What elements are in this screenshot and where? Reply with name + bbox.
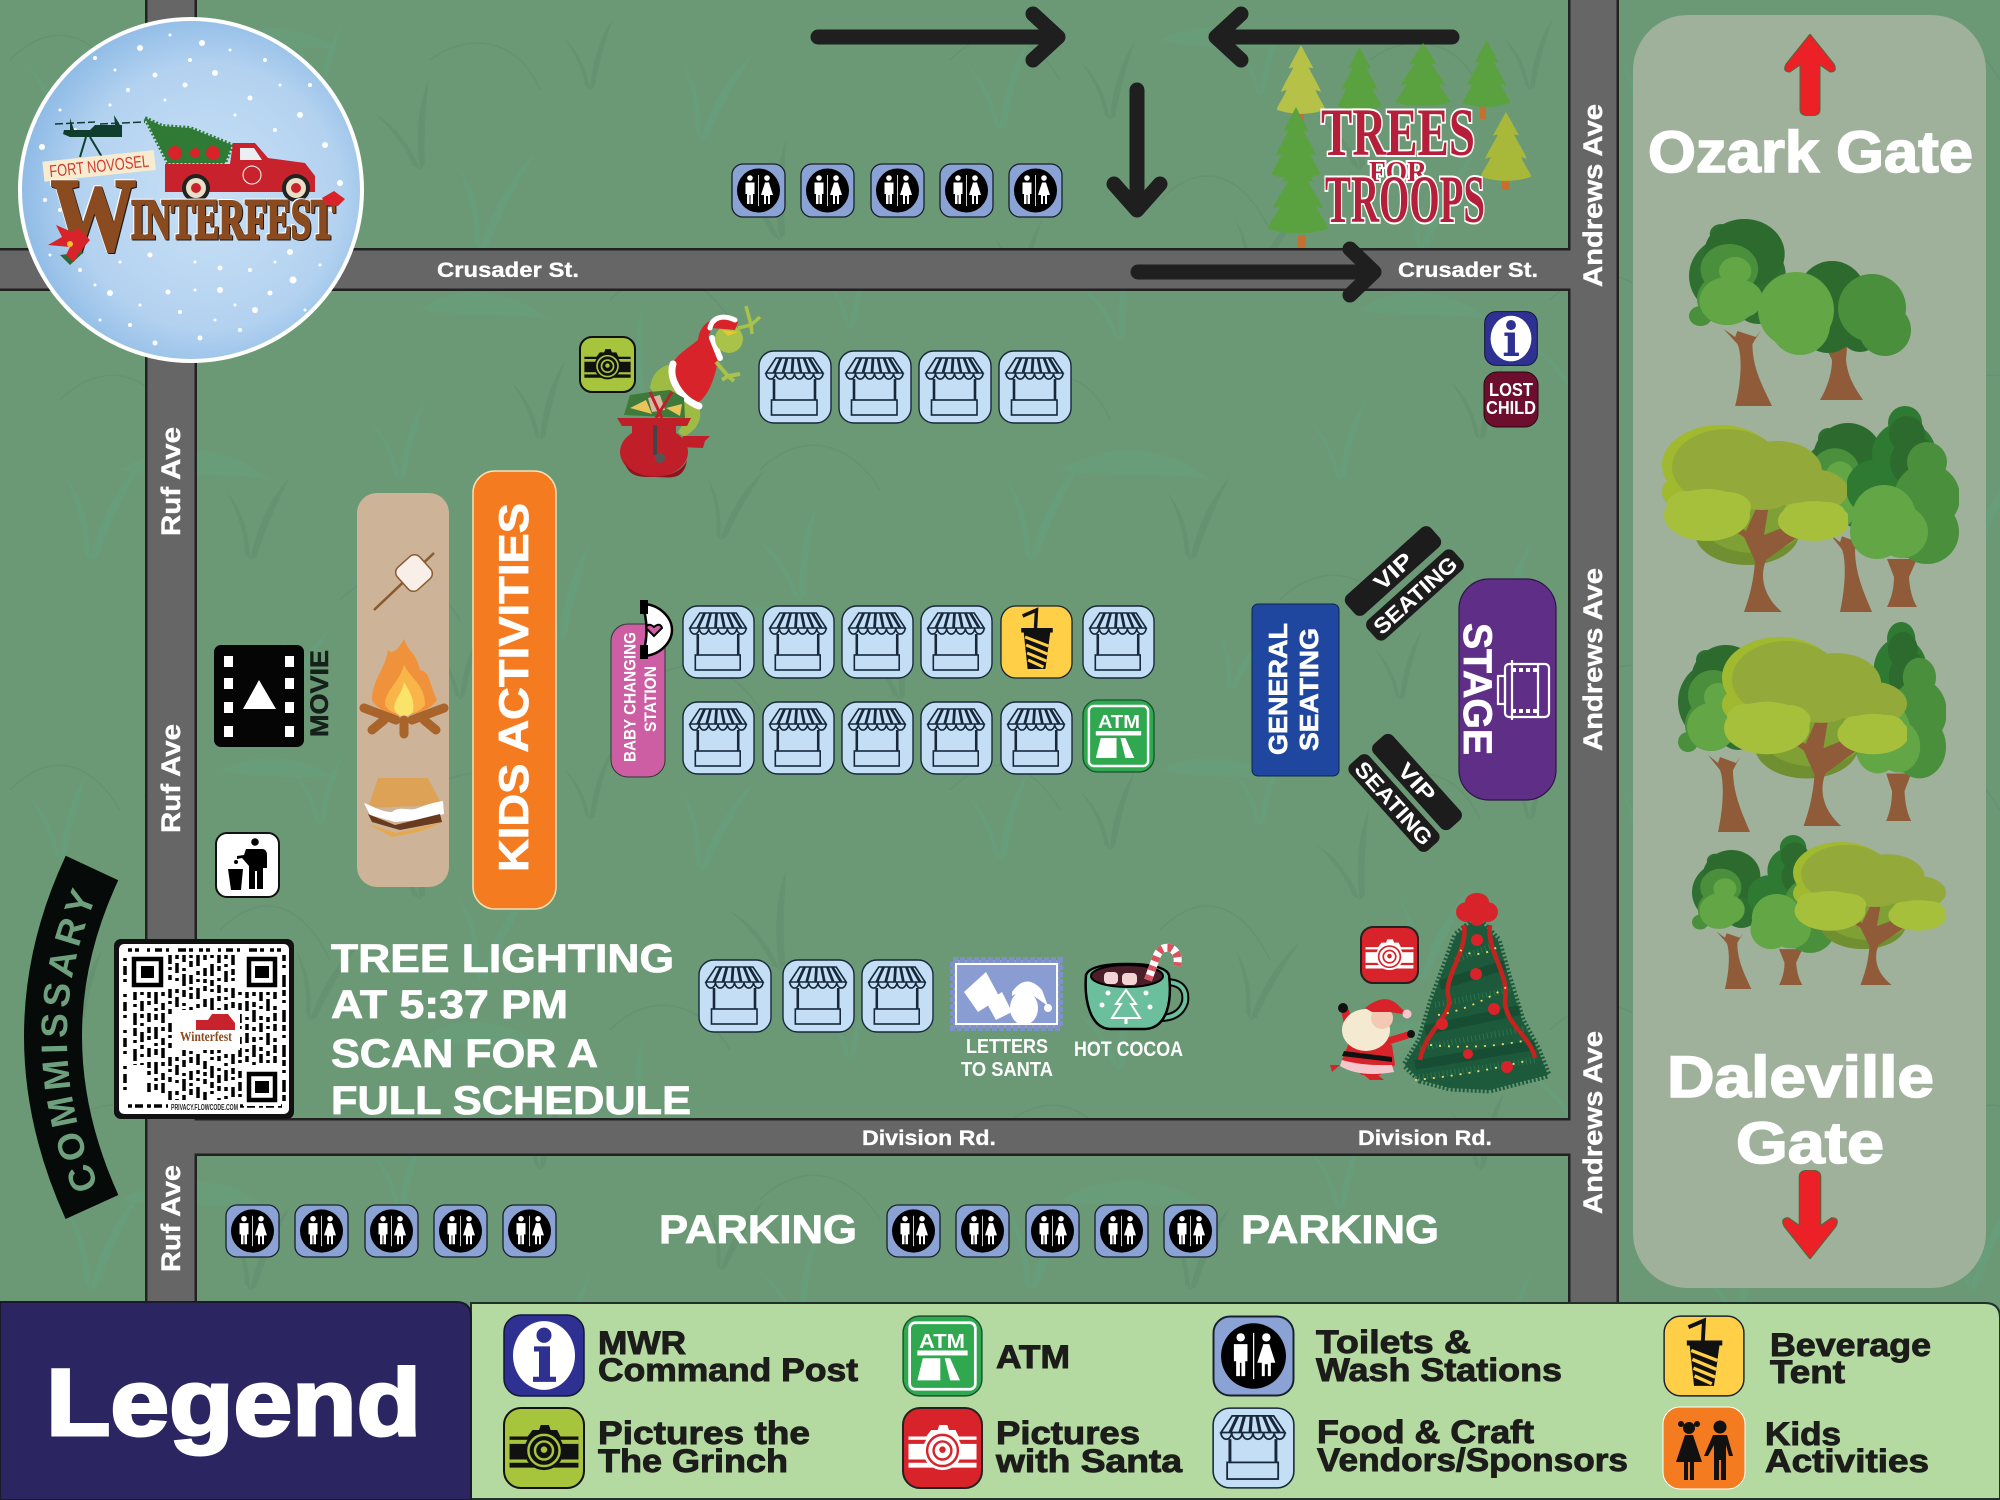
baby changing station: [611, 600, 672, 777]
text block: tree lighting schedule: FULL SCHEDULE: [331, 1079, 691, 1123]
arrow: to Ozark Gate: [1785, 34, 1835, 116]
legend item: food and craft vendors: [1213, 1408, 1628, 1488]
general seating: GENERAL: [1263, 623, 1293, 755]
arrow: downward: [1114, 90, 1160, 210]
legend title: Legend: [46, 1350, 421, 1456]
street label: Crusader St. right: Crusader St.: [1398, 259, 1538, 282]
vendor row middle 1: [683, 606, 992, 678]
legend item: food and craft vendors: Food & Craft: [1317, 1414, 1534, 1450]
legend item: MWR command post: [504, 1315, 858, 1396]
truck: [165, 143, 315, 202]
icon: Grinch photo spot camera: [580, 337, 635, 392]
legend item: pictures with the Grinch: Pictures the: [598, 1415, 810, 1451]
arrow: to Daleville Gate: [1783, 1170, 1837, 1259]
street label: Ruf Ave lower: Ruf Ave: [156, 1165, 186, 1272]
icon: beverage tent: [1001, 606, 1072, 678]
icon: movie film: [214, 645, 304, 747]
helicopter: [55, 115, 145, 157]
icon: marshmallow: [374, 552, 435, 610]
legend item: ATM: ATM: [919, 1331, 965, 1353]
poinsettias: [48, 191, 345, 265]
heading: Gate: Gate: [1736, 1111, 1884, 1176]
illustration: Santa: [1330, 999, 1415, 1080]
street label: Division Rd. right: Division Rd.: [1358, 1127, 1492, 1150]
label: letters to Santa: [961, 1036, 1053, 1081]
label: movie: MOVIE: [306, 650, 334, 737]
legend item: ATM: ATM: [996, 1339, 1070, 1375]
tree cluster 2: [1662, 406, 1960, 612]
VIP seating lower: SEATING: [1350, 756, 1438, 850]
icon: campfire: [364, 639, 444, 734]
panel: kids activities: KIDS ACTIVITIES: [490, 503, 537, 872]
legend item: beverage tent: Beverage: [1770, 1327, 1931, 1363]
legend item: pictures with the Grinch: The Grinch: [598, 1443, 788, 1479]
VIP seating upper: [1342, 523, 1467, 643]
toilets row top: [732, 164, 1062, 217]
vendor row middle 2: [683, 702, 1072, 774]
tree cluster 3: [1678, 622, 1947, 832]
icon: smore: [364, 778, 444, 837]
Trees for Troops logo: FOR: [1369, 157, 1428, 188]
banner: Fort Novosel: FORT NOVOSEL: [48, 152, 150, 181]
legend item: beverage tent: Tent: [1770, 1354, 1845, 1390]
text block: tree lighting schedule: TREE LIGHTING: [331, 937, 674, 981]
icon: stage structure: [1498, 660, 1549, 720]
icon: lost child: CHILD: [1486, 398, 1536, 418]
street label: Andrews Ave lower: Andrews Ave: [1578, 1031, 1608, 1214]
icon: Santa photo spot camera: [1361, 927, 1418, 983]
label: parking left: PARKING: [659, 1208, 857, 1252]
label: letters to Santa: TO SANTA: [961, 1059, 1053, 1081]
legend item: MWR command post: Command Post: [598, 1352, 858, 1388]
icon: ATM: ATM: [1098, 712, 1140, 732]
illustration: Grinch with sack: [617, 306, 760, 477]
icon: hot cocoa mug: [1086, 948, 1185, 1029]
icon: letters to Santa stamp: [953, 960, 1060, 1028]
tree cluster 1: [1689, 219, 1911, 406]
icon: lost child: [1484, 372, 1538, 427]
panel: kids activities: [473, 471, 556, 909]
legend item: kids activities: Kids: [1765, 1416, 1841, 1452]
street label: Crusader St. left: Crusader St.: [437, 259, 579, 282]
VIP seating lower: VIP: [1393, 758, 1441, 807]
toilets row parking left: [226, 1205, 556, 1257]
legend item: MWR command post: MWR: [598, 1325, 686, 1361]
panel: smores activities: [357, 493, 449, 887]
wordmark: Winterfest: INTERFEST: [131, 189, 335, 251]
general seating: SEATING: [1294, 628, 1324, 751]
Trees for Troops logo: TROOPS: [1325, 161, 1485, 237]
street label: Ruf Ave upper: Ruf Ave: [156, 427, 186, 536]
stage: [1455, 579, 1556, 800]
banner: Commissary curved sign: [24, 856, 118, 1219]
label: letters to Santa: LETTERS: [966, 1036, 1048, 1058]
vendor row bottom: [699, 960, 933, 1032]
toilets row parking right: [887, 1205, 1217, 1257]
label: parking right: PARKING: [1241, 1208, 1439, 1252]
wordmark: Winterfest: W: [51, 158, 136, 273]
tree cluster 4: [1692, 835, 1948, 989]
street label: Andrews Ave middle: Andrews Ave: [1578, 568, 1608, 751]
vendor end of row 1: [1083, 606, 1154, 678]
VIP seating lower: [1346, 731, 1465, 855]
general seating: [1252, 604, 1339, 776]
banner: Commissary curved sign: COMMISSARY: [41, 887, 96, 1191]
street label: Ruf Ave middle: Ruf Ave: [156, 724, 186, 833]
baby changing station: BABY CHANGING: [622, 632, 640, 762]
legend item: pictures with Santa: with Santa: [995, 1443, 1182, 1479]
VIP seating upper: VIP: [1369, 547, 1418, 595]
legend item: pictures with Santa: Pictures: [996, 1415, 1140, 1451]
truck tree: [145, 118, 232, 163]
icon: lost child: LOST: [1489, 380, 1533, 400]
legend item: ATM: [903, 1316, 1070, 1396]
text block: tree lighting schedule: AT 5:37 PM: [331, 983, 568, 1027]
legend item: toilets and wash stations: Toilets &: [1316, 1324, 1471, 1360]
road network: [0, 0, 1619, 1303]
QR code: [114, 939, 294, 1119]
legend item: beverage tent: [1664, 1316, 1931, 1396]
logo: Fort Novosel Winterfest: [20, 19, 362, 361]
label: hot cocoa: HOT COCOA: [1074, 1038, 1183, 1061]
heading: Daleville: Daleville: [1667, 1045, 1934, 1110]
legend item: kids activities: [1663, 1407, 1929, 1489]
icon: info / MWR command post: [1485, 312, 1537, 365]
icon: diaper: [640, 600, 672, 659]
panel: gates: [1633, 15, 1986, 1288]
text block: tree lighting schedule: SCAN FOR A: [331, 1032, 598, 1076]
arrow: Crusader road right-pointing: [1138, 249, 1374, 295]
heading: Ozark Gate: Ozark Gate: [1648, 120, 1973, 185]
arrow: top right-pointing: [818, 14, 1058, 60]
legend item: pictures with the Grinch: [504, 1408, 810, 1488]
text block: tree lighting schedule: [331, 937, 691, 1123]
VIP seating upper: SEATING: [1368, 551, 1462, 639]
legend item: pictures with Santa: [903, 1408, 1182, 1488]
panel: legend: [0, 1302, 2000, 1500]
vendor row top: [759, 351, 1071, 423]
icon: trash can: [216, 833, 279, 897]
Trees for Troops logo: TREES: [1321, 94, 1475, 170]
street label: Andrews Ave upper: Andrews Ave: [1578, 104, 1608, 287]
street label: Division Rd. left: Division Rd.: [862, 1127, 996, 1150]
legend item: kids activities: Activities: [1765, 1443, 1929, 1479]
tree bow: [1456, 893, 1498, 926]
icon: ATM: [1083, 700, 1154, 772]
QR code: PRIVACY.FLOWCODE.COM: [171, 1103, 238, 1112]
stage: STAGE: [1455, 623, 1499, 755]
illustration: Christmas tree: [1405, 893, 1548, 1090]
legend item: food and craft vendors: Vendors/Sponsors: [1317, 1442, 1628, 1478]
arrow: top left-pointing: [1216, 14, 1452, 60]
baby changing station: STATION: [642, 666, 660, 732]
QR code: Winterfest: [180, 1030, 232, 1045]
legend item: toilets and wash stations: Wash Stations: [1316, 1352, 1562, 1388]
Trees for Troops logo: [1268, 40, 1531, 248]
legend item: toilets and wash stations: [1214, 1316, 1562, 1396]
